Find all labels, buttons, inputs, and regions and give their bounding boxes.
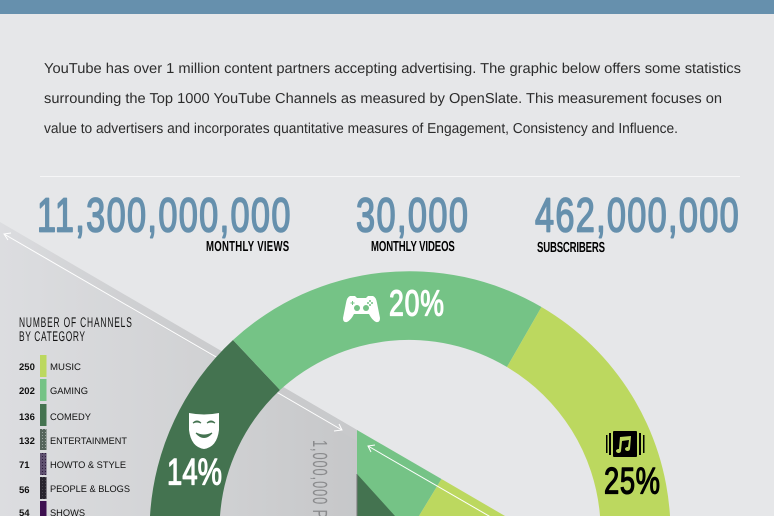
legend title: BY CATEGORY [19, 328, 85, 344]
top bar [0, 0, 774, 14]
legend swatches [40, 355, 46, 516]
legend counts: 136 [19, 412, 35, 423]
rotated label: 1,000,000 P [308, 440, 331, 516]
legend counts [19, 362, 35, 516]
ring chart [150, 271, 670, 516]
legend labels: PEOPLE & BLOGS [50, 484, 130, 495]
icon: music [606, 431, 644, 457]
legend counts: 202 [19, 386, 35, 397]
legend labels: ENTERTAINMENT [50, 436, 127, 447]
icon: game controller [343, 296, 380, 322]
stat: monthly views: MONTHLY VIEWS [206, 239, 289, 255]
legend labels [50, 362, 130, 516]
stat: monthly videos: MONTHLY VIDEOS [371, 239, 455, 255]
segment: comedy [150, 340, 280, 516]
legend counts: 132 [19, 436, 35, 447]
arrow: left wedge [4, 233, 342, 431]
legend title: NUMBER OF CHANNELS [19, 314, 132, 330]
segment: music [507, 307, 670, 516]
label: comedy 14%: 14% [167, 452, 222, 493]
legend counts: 56 [19, 485, 30, 496]
stat: monthly views: 11,300,000,000 [37, 189, 290, 242]
segment: gaming [233, 271, 542, 390]
stat: subscribers: SUBSCRIBERS [537, 240, 605, 256]
grey wedge: 1,000,000 partners [0, 222, 357, 516]
label: music 25%: 25% [604, 461, 660, 502]
intro paragraph: surrounding the Top 1000 YouTube Channels as measured by OpenSlate. This measurement focuses on [44, 91, 722, 107]
legend labels: COMEDY [50, 412, 92, 423]
legend counts: 71 [19, 460, 30, 471]
stat: subscribers: 462,000,000 [535, 189, 739, 242]
intro paragraph: YouTube has over 1 million content partners accepting advertising. The graphic below offers some statistics [44, 61, 741, 77]
intro paragraph: value to advertisers and incorporates quantitative measures of Engagement, Consistency and Influence. [44, 121, 678, 137]
legend counts: 250 [19, 362, 35, 373]
icon: comedy mask [189, 413, 219, 449]
stat: monthly videos: 30,000 [356, 189, 468, 242]
arrow: right wedge [368, 445, 508, 516]
legend labels: GAMING [50, 386, 88, 397]
legend labels: HOWTO & STYLE [50, 460, 126, 471]
label: gaming 20%: 20% [389, 283, 444, 323]
legend labels: MUSIC [50, 362, 81, 373]
legend: channels by category [19, 314, 132, 516]
legend title [19, 314, 132, 344]
intro paragraph [44, 61, 741, 137]
inner wedge segments [356, 430, 505, 516]
